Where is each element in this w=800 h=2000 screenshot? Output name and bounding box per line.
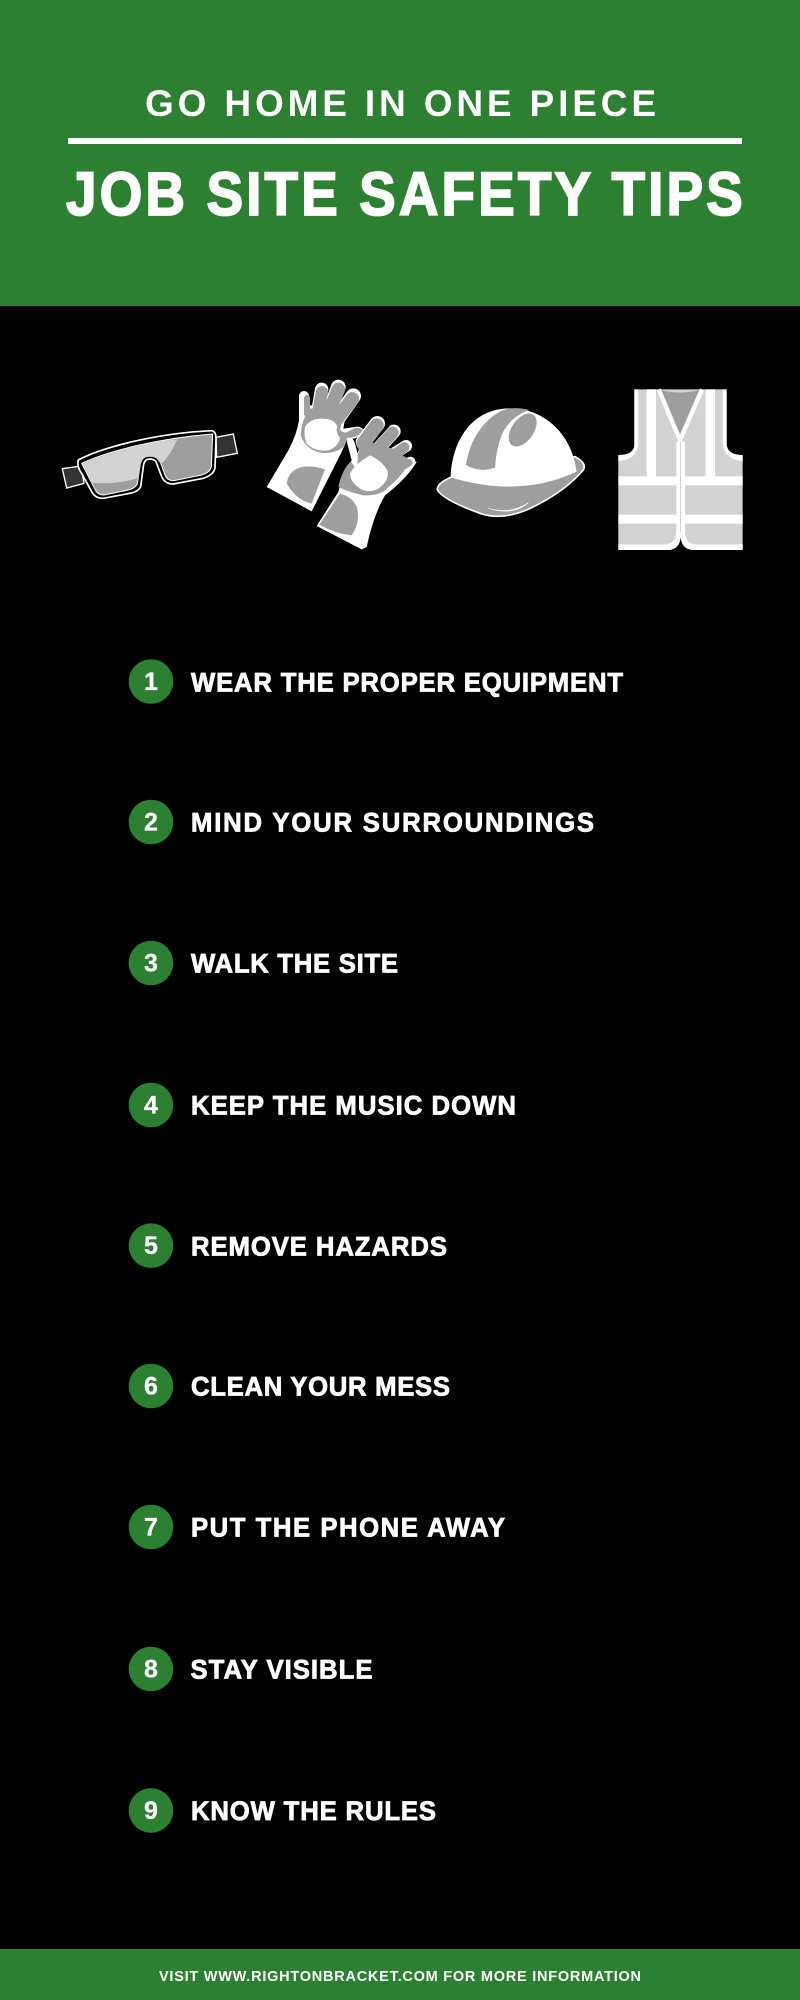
icon: high-visibility vest xyxy=(618,389,743,550)
list item 7 xyxy=(129,1505,505,1549)
list item 1 xyxy=(129,659,623,704)
list item 1: 1 xyxy=(144,668,158,696)
panel: header banner xyxy=(0,0,800,306)
list item 4: 4 xyxy=(144,1092,158,1120)
list item 9: KNOW THE RULES xyxy=(191,1796,436,1826)
list item 4: KEEP THE MUSIC DOWN xyxy=(191,1090,516,1120)
list item 2: MIND YOUR SURROUNDINGS xyxy=(191,807,594,838)
list item 8: STAY VISIBLE xyxy=(190,1654,372,1684)
icon: work gloves xyxy=(267,387,417,549)
icon: safety goggles xyxy=(62,431,237,498)
subtitle: GO HOME IN ONE PIECE xyxy=(145,83,656,124)
title: JOB SITE SAFETY TIPS xyxy=(66,160,743,229)
list item 9: 9 xyxy=(144,1797,158,1825)
list item 5 xyxy=(129,1223,447,1268)
list item 8 xyxy=(129,1647,372,1691)
list item 6 xyxy=(129,1364,450,1408)
list item 6: 6 xyxy=(144,1372,158,1400)
icon: hard hat xyxy=(437,408,584,516)
list item 7: PUT THE PHONE AWAY xyxy=(191,1512,505,1543)
list item 8: 8 xyxy=(144,1656,158,1684)
list item 3 xyxy=(129,941,398,985)
list item 3: 3 xyxy=(144,950,158,978)
list item 9 xyxy=(129,1788,436,1833)
list item 5: REMOVE HAZARDS xyxy=(191,1231,447,1262)
panel: footer banner xyxy=(0,1949,800,2000)
list item 5: 5 xyxy=(144,1232,158,1260)
list item 6: CLEAN YOUR MESS xyxy=(191,1371,450,1401)
list item 1: WEAR THE PROPER EQUIPMENT xyxy=(191,667,623,698)
list item 2 xyxy=(129,800,594,844)
list item 2: 2 xyxy=(144,808,158,836)
footer text: VISIT WWW.RIGHTONBRACKET.COM FOR MORE INFORMATION xyxy=(159,1969,641,1985)
list item 3: WALK THE SITE xyxy=(191,948,398,978)
list item 7: 7 xyxy=(144,1514,158,1542)
list item 4 xyxy=(129,1083,516,1127)
